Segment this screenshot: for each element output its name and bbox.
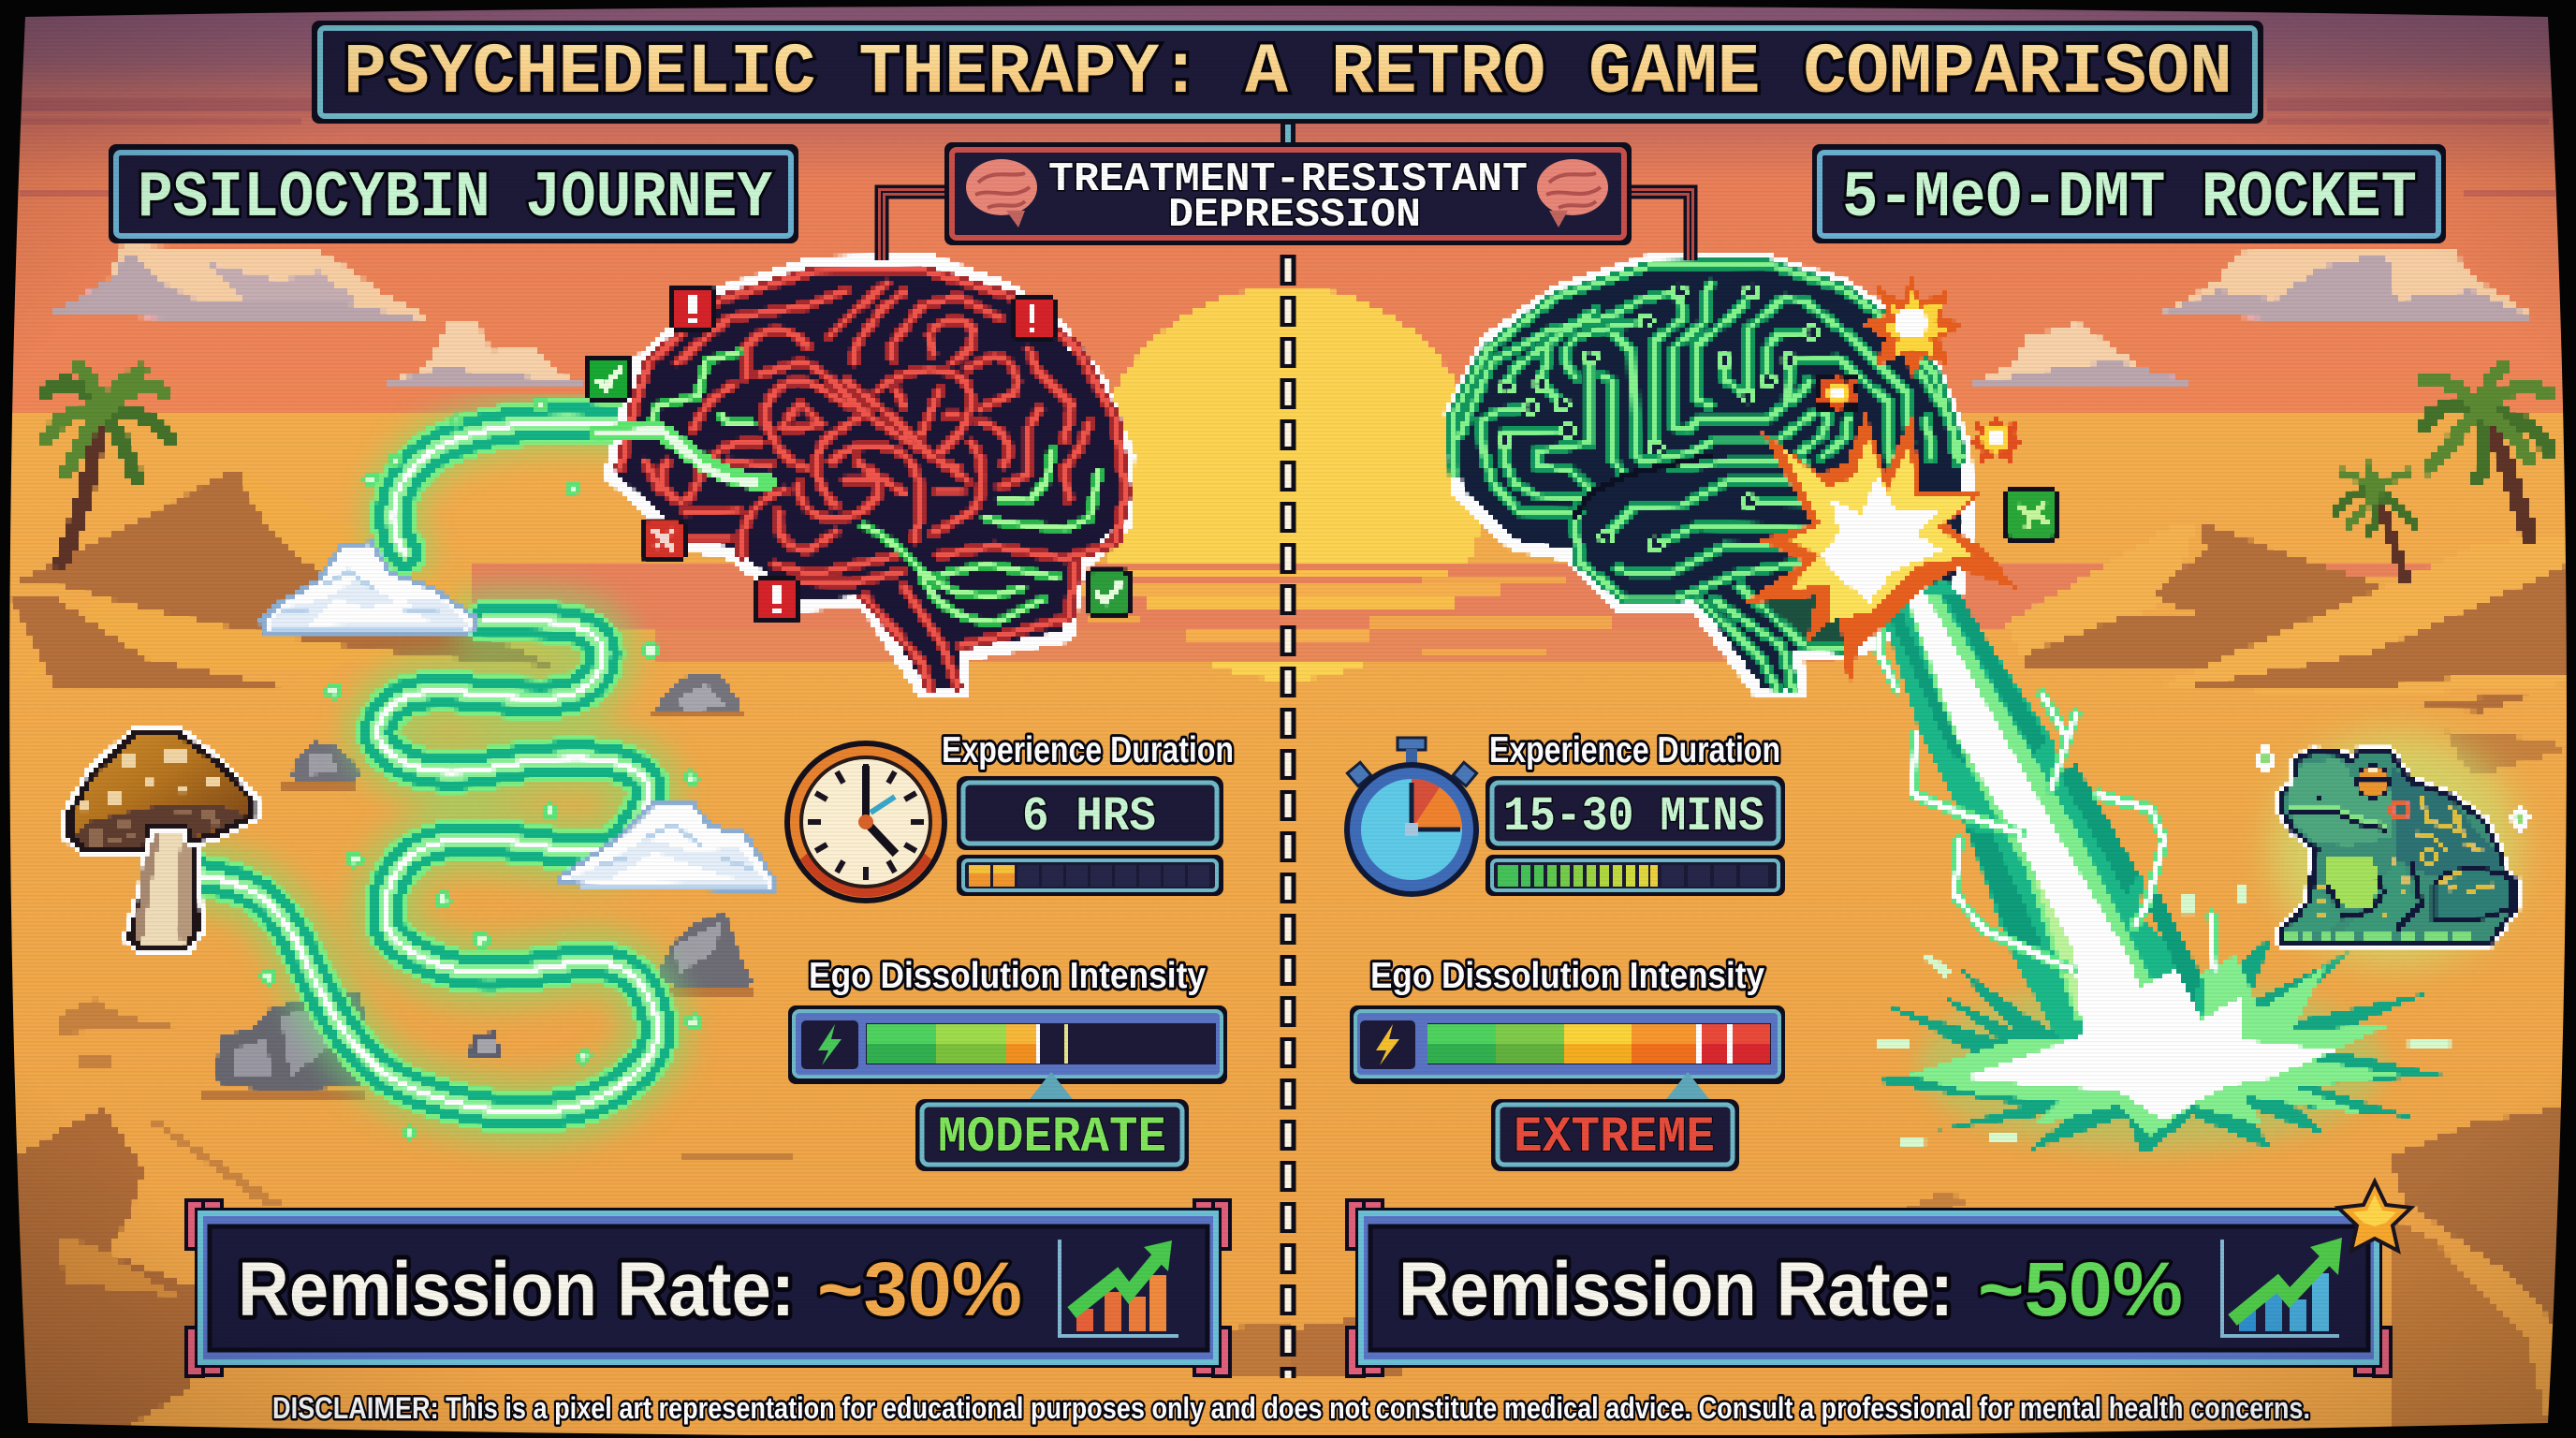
cloud over path lower — [560, 802, 772, 891]
panel: remission rate 5-MeO-DMT: ~50% — [1978, 1247, 2183, 1332]
toad eye — [2355, 764, 2391, 800]
beam white core — [1900, 579, 2159, 1045]
toad head — [2287, 758, 2393, 845]
badge: error x — [643, 520, 684, 559]
callout: extreme — [1491, 1072, 1739, 1171]
toad glow — [2272, 733, 2521, 964]
progress bar: 15-30 minutes duration — [1486, 855, 1785, 896]
condition text: TREATMENT-RESISTANT — [1048, 156, 1528, 203]
toad nostril — [2317, 794, 2322, 800]
panel: psilocybin heading — [109, 144, 798, 243]
rock lower left — [201, 992, 367, 1100]
sparkle left of toad — [2254, 742, 2276, 775]
toad upper lip — [2287, 805, 2387, 830]
corner brackets — [186, 1200, 1230, 1376]
sea reflection stripes — [472, 565, 2434, 665]
icon: analog clock — [784, 741, 947, 903]
cap spots — [81, 748, 218, 812]
upper left cloud — [50, 245, 427, 320]
label: psilocybin ego dissolution: Ego Dissolution Intensity — [809, 956, 1206, 996]
explosion on right brain — [1742, 412, 2018, 690]
upper right cloud — [2159, 247, 2532, 320]
beam body — [1880, 579, 2205, 1040]
toad back — [2393, 765, 2506, 880]
callout: moderate — [915, 1072, 1189, 1171]
connector lines from condition panel to brains — [882, 192, 1690, 260]
sparkle right of toad — [2509, 803, 2531, 835]
toad markings — [2417, 796, 2493, 892]
rock top — [651, 672, 744, 718]
chart icon — [2222, 1238, 2342, 1336]
left dune — [9, 468, 562, 691]
panel: condition heading — [944, 142, 1632, 245]
sand ground — [0, 413, 2576, 1438]
stem — [130, 823, 198, 948]
badge: warning 1 — [671, 287, 714, 329]
small burst right — [1969, 416, 2024, 462]
readout: 6 hours: 6 HRS — [1022, 789, 1156, 844]
icon: left pink brain — [966, 159, 1037, 227]
heading text: PSILOCYBIN JOURNEY — [138, 162, 772, 236]
badge: check 1 — [587, 358, 630, 399]
palm tree left — [45, 367, 171, 562]
label: psilocybin experience duration: Experience Duration — [942, 730, 1234, 770]
title banner — [312, 21, 2263, 124]
icon: gold star — [2338, 1181, 2411, 1251]
small burst top — [1861, 277, 1966, 379]
toad mouth — [2287, 812, 2387, 830]
ground burst mid — [1909, 955, 2402, 1136]
label: 5-MeO-DMT experience duration: Experience Duration — [1489, 730, 1780, 770]
toad front leg — [2287, 877, 2347, 933]
panel: remission rate 5-MeO-DMT — [1347, 1200, 2391, 1376]
brain silhouette — [1450, 259, 1969, 693]
icon: stopwatch — [1344, 738, 1479, 897]
lightning arcs — [1880, 619, 2214, 970]
corner brackets — [1347, 1200, 2391, 1376]
gauge: extreme ego dissolution — [1350, 1005, 1785, 1084]
chart icon — [1060, 1240, 1178, 1336]
cloud over path upper — [261, 543, 476, 632]
remission text: Remission Rate: — [1398, 1247, 1954, 1332]
beam and ground burst — [1871, 579, 2450, 1155]
toad outline — [2281, 752, 2515, 943]
toad sprite — [2272, 733, 2521, 964]
badge: warning 3 — [755, 580, 798, 621]
left brain: tangled circuits — [599, 259, 1129, 693]
circuit nodes — [1499, 286, 1819, 551]
rock small — [468, 1032, 502, 1056]
gauge: moderate ego dissolution — [788, 1005, 1227, 1084]
sparks — [1876, 885, 2450, 1146]
readout: 15-30 minutes — [1486, 776, 1785, 850]
temporal lobe gap — [1575, 456, 1709, 515]
ground burst core — [1963, 970, 2335, 1121]
toad haunch — [2434, 870, 2511, 920]
illustration layer — [70, 259, 2531, 1155]
title text: PSYCHEDELIC THERAPY: A RETRO GAME COMPARISON — [344, 33, 2232, 113]
badge: check 2 — [1087, 571, 1130, 614]
panel: 5-MeO-DMT heading — [1812, 144, 2446, 243]
burst glow — [1917, 980, 2385, 1151]
glowing green winding path — [190, 421, 657, 1112]
palm tree right small — [2336, 466, 2413, 580]
gills — [75, 804, 247, 847]
badge: warning 2 — [1012, 298, 1055, 339]
lower right dunes — [1217, 1105, 2576, 1438]
red tangled lines — [621, 270, 1126, 690]
brain silhouette — [609, 259, 1129, 693]
ground burst outer — [1871, 935, 2444, 1155]
panel: condition heading: DEPRESSION — [1168, 192, 1421, 239]
palm tree right large — [2424, 367, 2548, 538]
rock right — [655, 913, 754, 996]
panel: remission rate psilocybin — [186, 1200, 1230, 1376]
right dunes — [2005, 521, 2576, 712]
centre dashed divider — [1281, 122, 1295, 1378]
badge: repaired circuit — [2006, 489, 2056, 539]
readout: 6 hours — [957, 776, 1223, 850]
readout: 15-30 minutes: 15-30 MINS — [1503, 789, 1764, 844]
progress bar: 6 hours duration — [957, 855, 1223, 896]
sun — [1091, 286, 1485, 680]
panel: remission rate psilocybin: ~30% — [817, 1247, 1022, 1332]
lower left dune — [0, 1107, 281, 1438]
sky streaks — [19, 99, 2555, 199]
rock upper middle — [281, 741, 359, 789]
mushroom sprite — [70, 731, 252, 948]
icon: right pink brain — [1537, 159, 1608, 227]
right brain: clean circuits — [1450, 259, 1969, 693]
toad feet — [2286, 928, 2471, 945]
heading text: 5-MeO-DMT ROCKET — [1842, 162, 2417, 236]
healing green lines — [599, 353, 1099, 623]
label: 5-MeO-DMT ego dissolution: Ego Dissolution Intensity — [1370, 956, 1764, 996]
upper left small cloud — [386, 323, 583, 386]
callout: moderate: MODERATE — [938, 1109, 1166, 1167]
sand specks — [56, 730, 2569, 1226]
toad gland — [2391, 801, 2408, 818]
remission text: Remission Rate: — [238, 1247, 795, 1332]
toad belly — [2326, 855, 2380, 908]
sky — [0, 0, 2576, 431]
small burst middle — [1815, 373, 1859, 414]
green circuit lines — [1454, 264, 1961, 690]
upper right small cloud — [1969, 323, 2191, 386]
sparkles along the path — [262, 399, 700, 1137]
cap — [70, 731, 252, 849]
callout: extreme: EXTREME — [1514, 1109, 1715, 1167]
